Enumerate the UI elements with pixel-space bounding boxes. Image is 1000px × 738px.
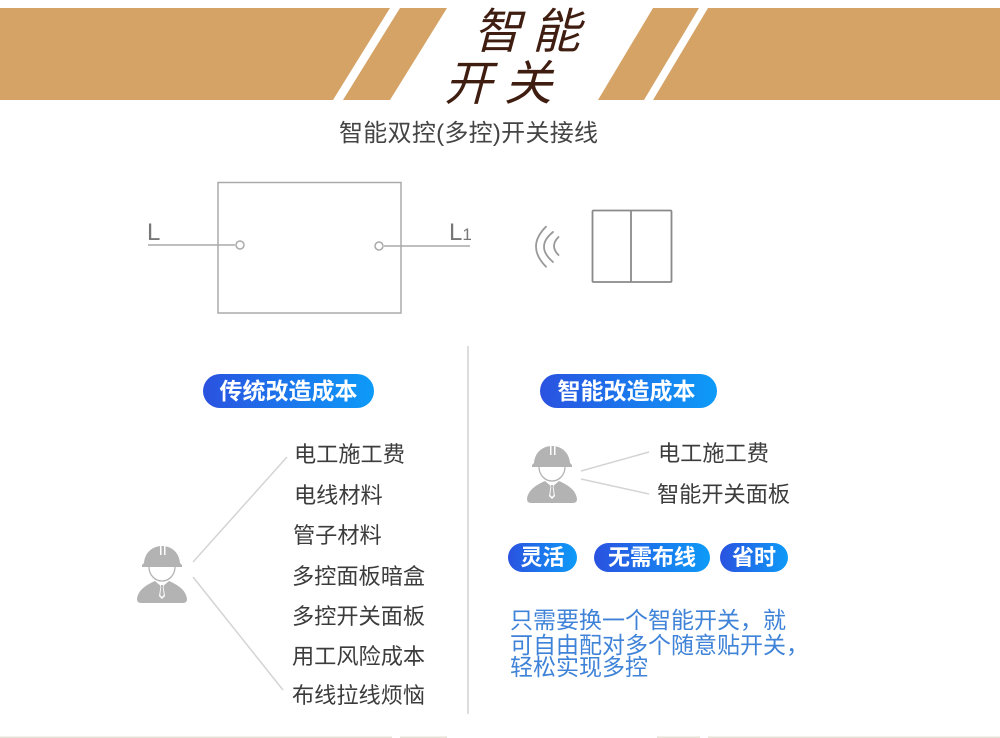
bottom band <box>0 736 1000 738</box>
pill heading: traditional: 传统改造成本 <box>220 378 358 404</box>
icon: wireless signal <box>536 227 558 267</box>
cost item list: 电线材料 <box>294 483 383 508</box>
icon: worker <box>137 545 187 603</box>
title: 开 <box>441 58 503 111</box>
cost item list: 管子材料 <box>293 523 382 548</box>
title <box>441 6 591 111</box>
tag: flexible: 灵活 <box>520 545 565 570</box>
pill heading: smart: 智能改造成本 <box>558 378 696 404</box>
description text <box>510 607 809 680</box>
tag: no wiring: 无需布线 <box>608 545 696 570</box>
icon: double wall switch <box>592 210 672 282</box>
cost item list: 多控面板暗盒 <box>292 564 425 589</box>
tag: no wiring <box>594 543 710 572</box>
cost item list: 用工风险成本 <box>292 644 425 669</box>
label: L: L <box>147 219 160 246</box>
description text: 只需要换一个智能开关，就 <box>510 607 786 633</box>
divider <box>467 346 469 714</box>
subtitle: 智能双控(多控)开关接线 <box>339 120 598 147</box>
pill heading: smart <box>540 374 717 408</box>
cost item list: 智能开关面板 <box>657 482 790 507</box>
title: 智 <box>470 6 532 59</box>
wiring diagram <box>147 182 472 313</box>
cost item list <box>657 441 790 507</box>
tag: saves time <box>720 543 788 572</box>
tag: flexible <box>508 543 577 572</box>
label: L1: L1 <box>449 219 472 246</box>
title: 关 <box>501 58 563 111</box>
cost item list: 多控开关面板 <box>292 604 425 629</box>
tag: saves time: 省时 <box>732 545 776 570</box>
cost item list <box>292 442 425 708</box>
description text: 轻松实现多控 <box>510 654 648 680</box>
panel: smart cost <box>508 374 809 680</box>
description text: 可自由配对多个随意贴开关， <box>510 632 809 658</box>
connector lines <box>193 457 287 690</box>
cost item list: 电工施工费 <box>658 441 769 466</box>
header banner <box>0 8 1000 100</box>
cost item list: 布线拉线烦恼 <box>292 683 425 708</box>
cost item list: 电工施工费 <box>294 442 405 467</box>
title: 能 <box>529 6 591 59</box>
connector lines <box>581 452 649 494</box>
icon: worker <box>527 445 577 503</box>
pill heading: traditional <box>203 374 374 408</box>
panel: traditional cost <box>137 374 425 708</box>
